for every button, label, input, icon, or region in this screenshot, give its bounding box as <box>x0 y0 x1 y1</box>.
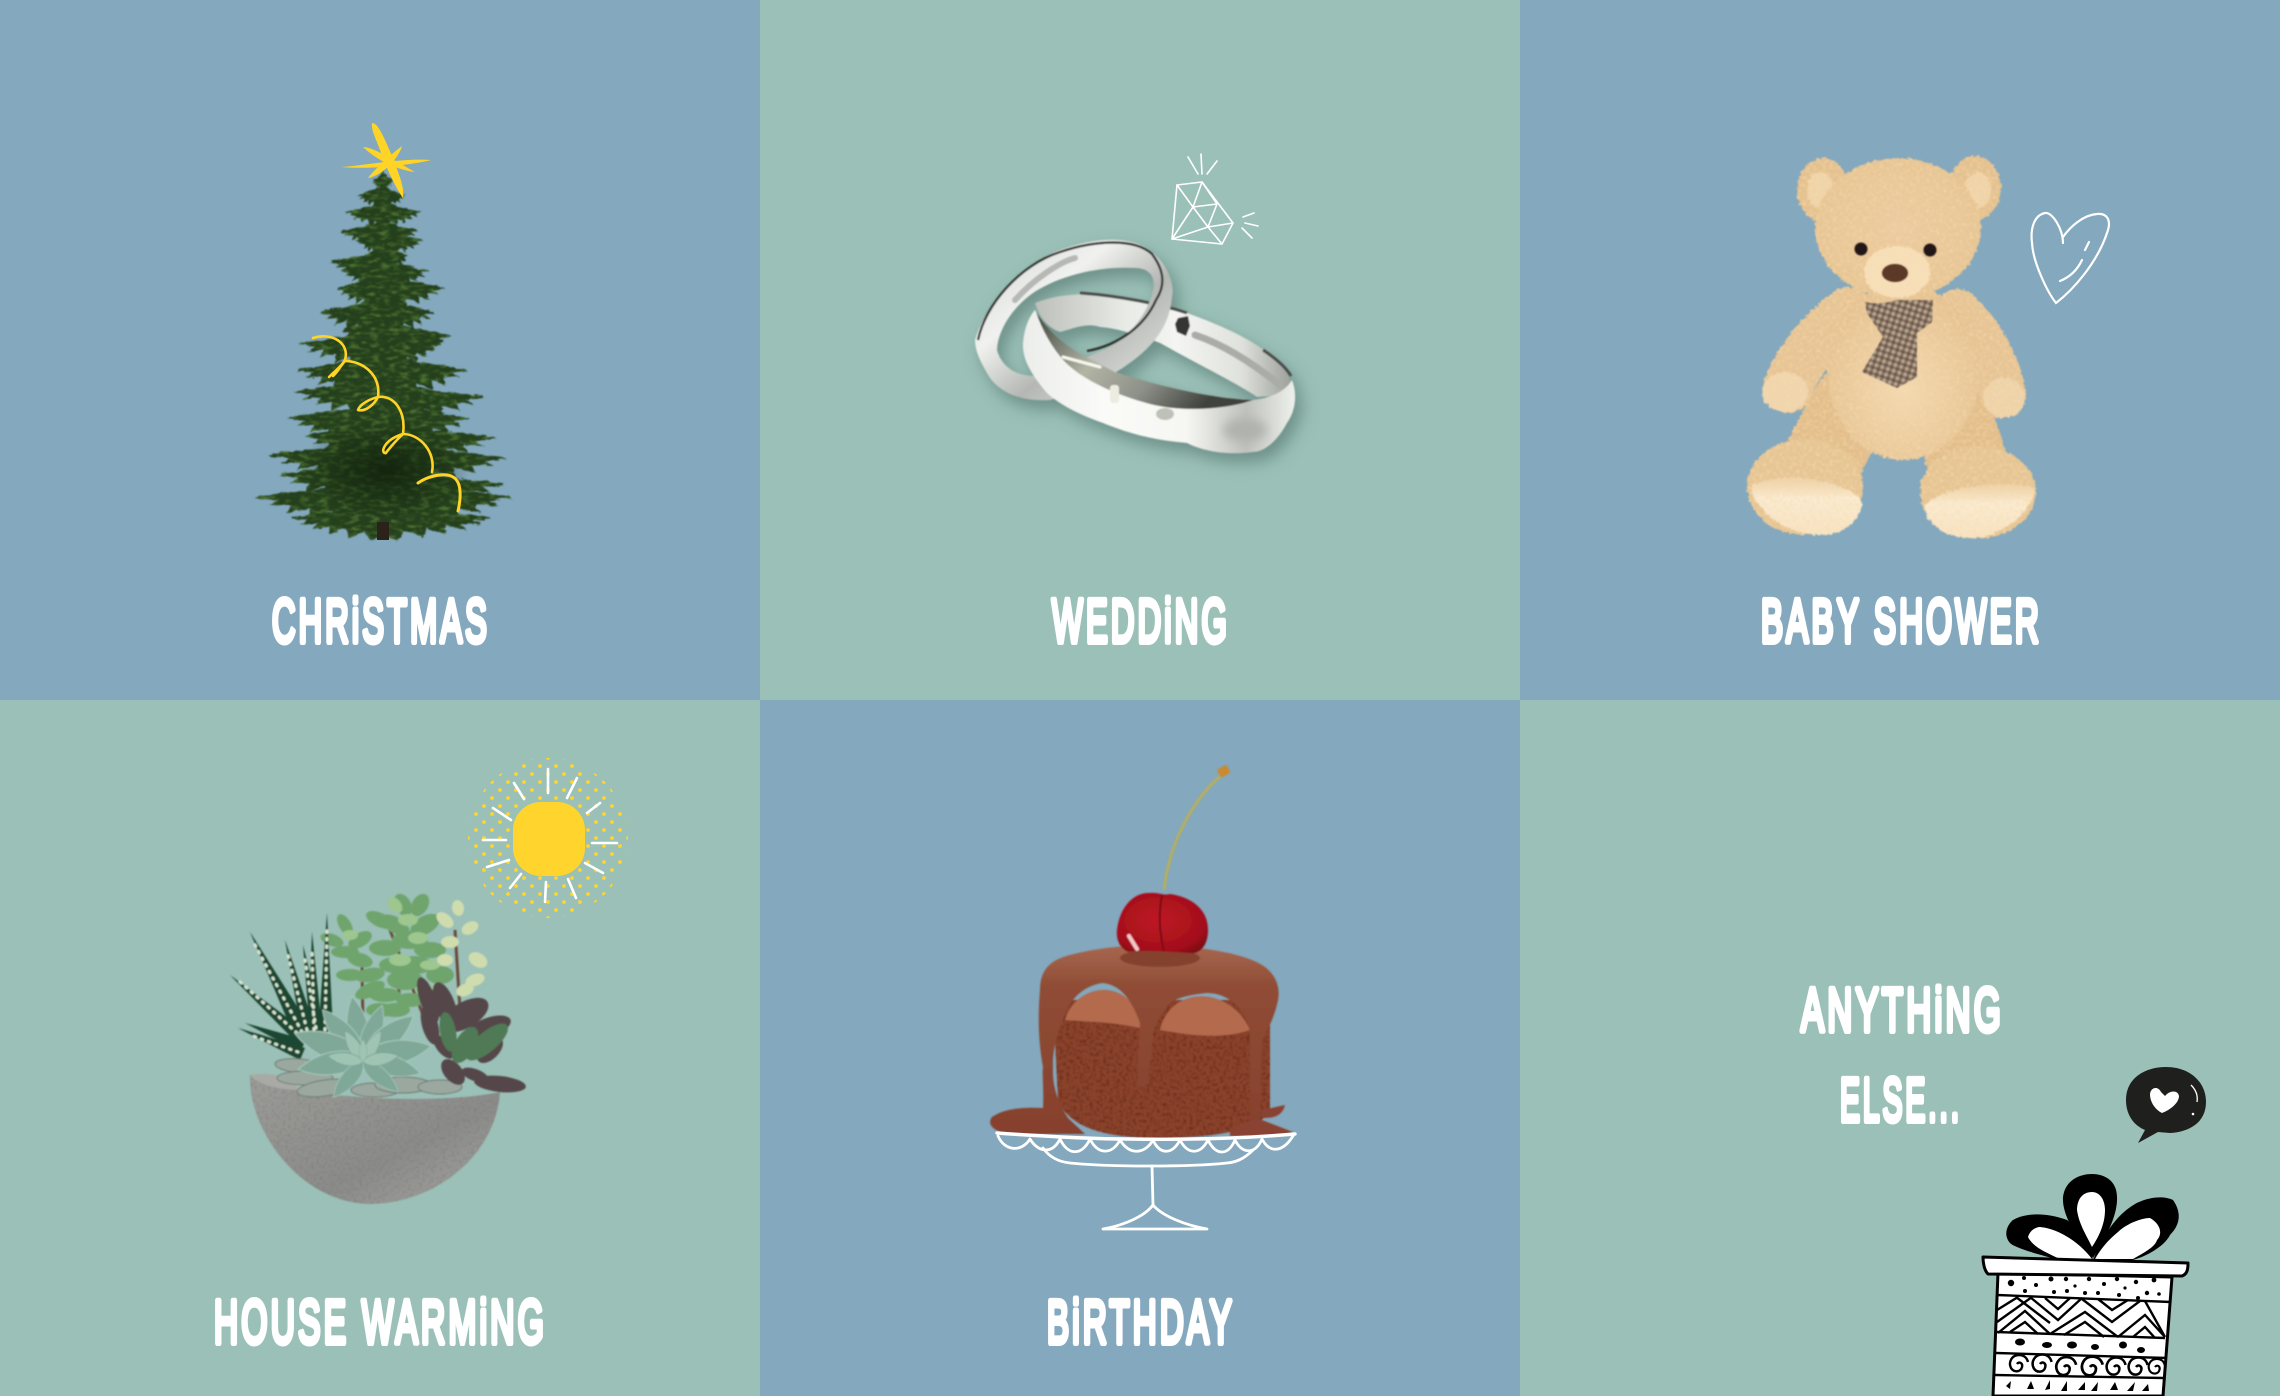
panel: birthday <box>760 700 1520 1396</box>
heading: baby shower: BABY SHOWER <box>1761 587 2042 655</box>
icon: gold ribbon <box>313 336 460 511</box>
panel: wedding <box>760 0 1520 700</box>
icon: chocolate cake <box>990 765 1293 1138</box>
icon: sun <box>468 758 628 918</box>
heading: house warming: HOUSE WARMiNG <box>214 1288 547 1356</box>
heading: anything else: ANYTHiNG <box>1801 976 2004 1044</box>
icon: diamond <box>1172 154 1258 244</box>
heading: birthday: BiRTHDAY <box>1047 1288 1235 1356</box>
icon: gold star <box>341 123 431 198</box>
panel: house warming <box>0 700 760 1396</box>
icon: cake stand <box>997 1133 1295 1229</box>
icon: succulent bowl <box>230 891 527 1204</box>
icon: teddy bear <box>1747 156 2036 538</box>
icon: speech bubble with heart <box>2126 1067 2206 1143</box>
heading: wedding: WEDDiNG <box>1052 587 1230 655</box>
icon: wedding rings <box>975 240 1295 453</box>
icon: gift box <box>1983 1174 2188 1396</box>
panel: christmas <box>0 0 760 700</box>
heading: christmas: CHRiSTMAS <box>272 587 490 655</box>
panel: baby shower <box>1520 0 2280 700</box>
icon: heart outline <box>2032 213 2109 303</box>
icon: christmas tree <box>255 123 513 540</box>
panel: anything else <box>1520 700 2280 1396</box>
panel: anything else: ELSE... <box>1840 1066 1962 1134</box>
